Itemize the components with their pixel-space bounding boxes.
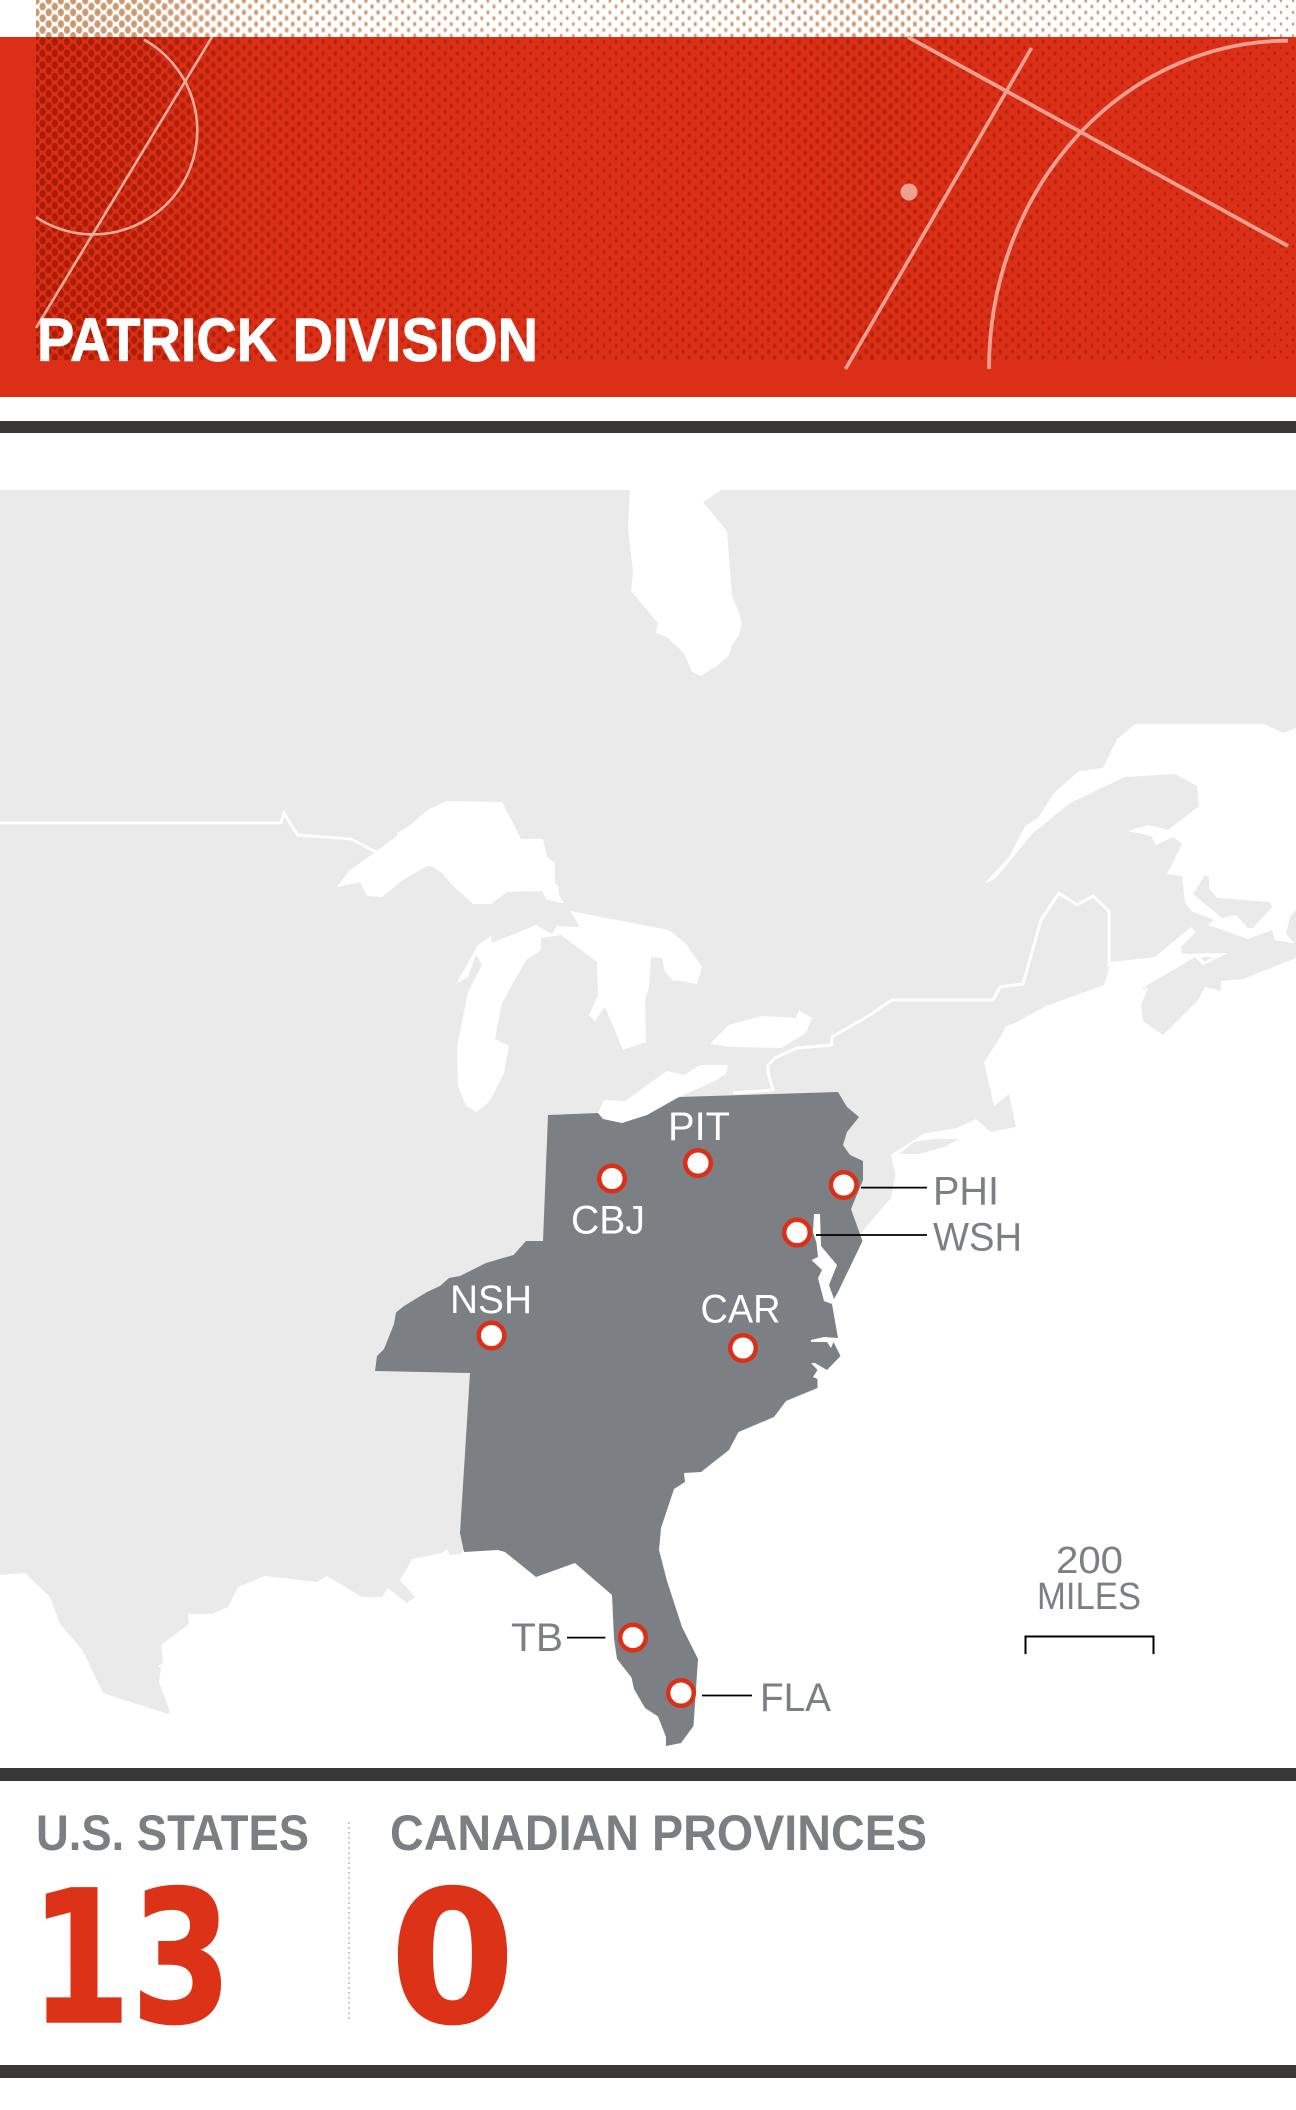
land	[0, 490, 1296, 1768]
title: PATRICK DIVISION	[37, 306, 538, 374]
gulf of st lawrence	[984, 724, 1296, 943]
bottom divider bar	[0, 2065, 1296, 2078]
marker: NSH: NSH	[450, 1278, 532, 1322]
hudson bay	[628, 490, 742, 676]
marker: WSH	[784, 1216, 1022, 1260]
scale bar: 200 miles	[1026, 1540, 1154, 1654]
chesapeake bay	[812, 1214, 837, 1304]
stat: U.S. states: U.S. STATES	[36, 1805, 309, 1861]
marker: CBJ	[571, 1166, 645, 1242]
scale bar: 200 miles: 200	[1056, 1540, 1123, 1582]
marker: TB	[511, 1616, 646, 1660]
team markers and labels	[450, 1105, 1022, 1720]
marker: PIT: PIT	[668, 1105, 730, 1149]
lakes michigan and huron	[456, 911, 702, 1112]
island in the gulf	[1193, 875, 1272, 928]
marker: TB: TB	[511, 1616, 563, 1660]
marker: PIT	[668, 1105, 730, 1176]
marker: PHI	[831, 1170, 999, 1214]
stat: Canadian provinces: 0	[390, 1852, 515, 2066]
small island in strait	[1201, 957, 1213, 962]
marker: CAR: CAR	[700, 1288, 780, 1332]
long island	[899, 1139, 959, 1154]
lake superior	[337, 801, 564, 904]
marker: FLA: FLA	[760, 1676, 831, 1720]
halftone strip	[36, 0, 1296, 37]
header band: halftone strip and red panel	[0, 0, 1296, 397]
lake ontario	[710, 1010, 812, 1048]
marker: WSH: WSH	[933, 1216, 1022, 1260]
scale bar: 200 miles: MILES	[1037, 1576, 1141, 1618]
patrick division states	[375, 1092, 863, 1746]
stat: U.S. states: 13	[30, 1852, 232, 2066]
stat: Canadian provinces	[390, 1805, 927, 2066]
border: us-canada west	[0, 813, 376, 852]
top divider bar	[0, 421, 1296, 433]
ocean: gulf and atlantic	[0, 927, 1296, 1768]
court lines: left circle and line	[36, 37, 212, 328]
border: us-canada east	[733, 893, 1109, 1093]
red panel	[0, 37, 1296, 397]
stat: Canadian provinces: CANADIAN PROVINCES	[390, 1805, 927, 1861]
marker: CAR	[700, 1288, 780, 1361]
marker: CBJ: CBJ	[571, 1198, 645, 1242]
marker: FLA	[668, 1676, 831, 1720]
dotted column divider	[348, 1822, 350, 2020]
marker: NSH	[450, 1278, 532, 1348]
divider bar above stats	[0, 1768, 1296, 1781]
court lines: right lines, arc and dot	[846, 37, 1288, 369]
map	[0, 490, 1296, 1768]
marker: PHI: PHI	[933, 1170, 999, 1214]
lake erie	[598, 1065, 728, 1128]
red halftone texture	[36, 37, 1296, 360]
